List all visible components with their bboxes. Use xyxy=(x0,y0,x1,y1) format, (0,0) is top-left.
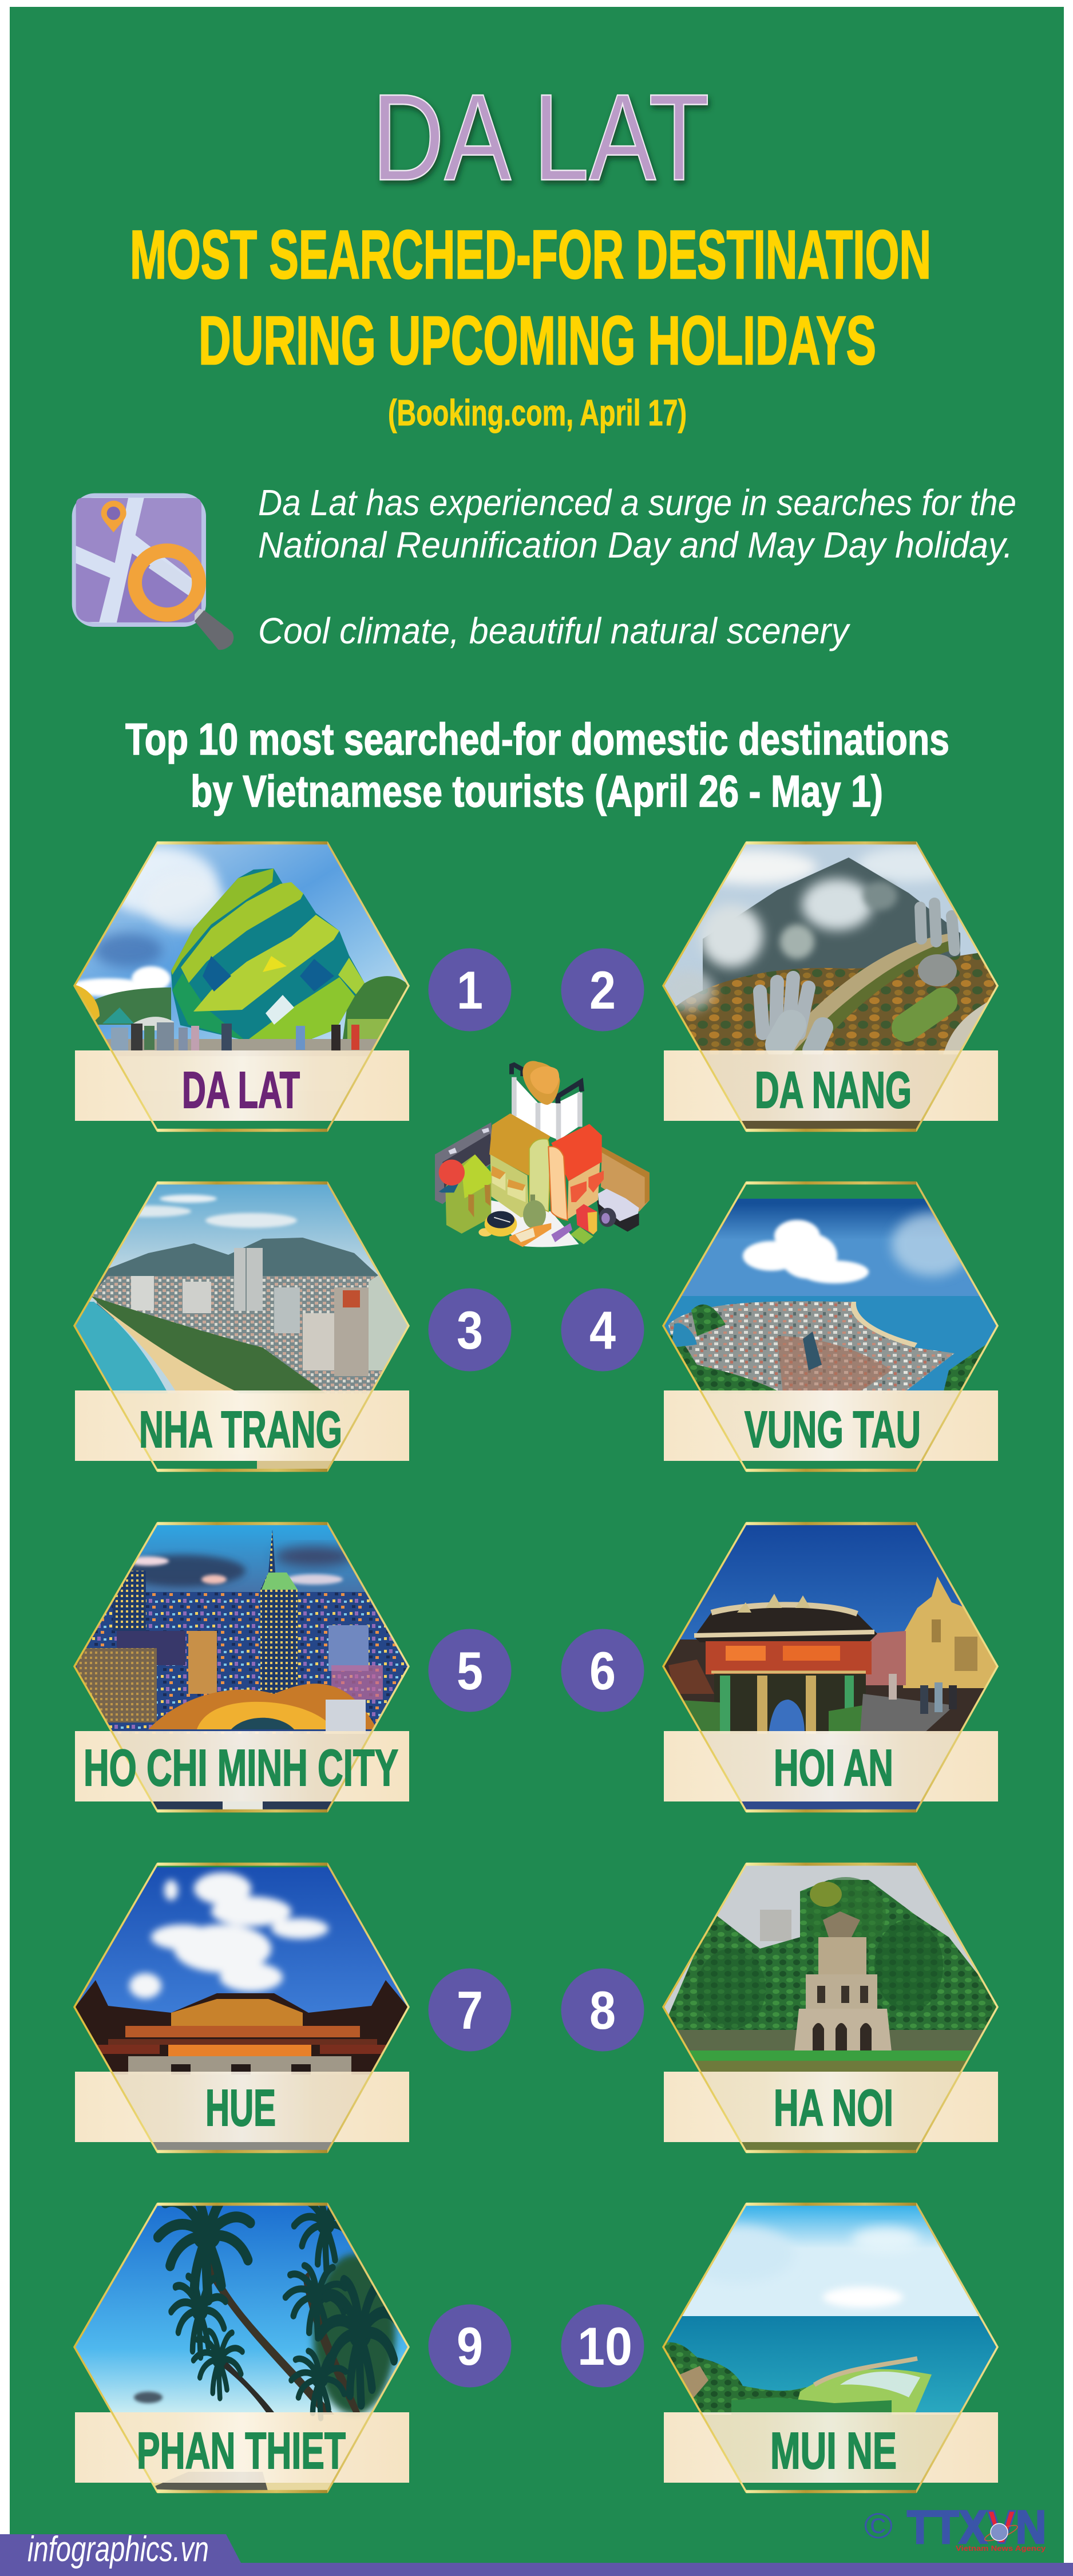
name: PHAN THIET xyxy=(137,2423,346,2480)
rank 7 xyxy=(428,1968,512,2052)
panel: 1 Da Lat xyxy=(68,843,409,1131)
rank 9 xyxy=(428,2305,512,2387)
hexagon frame xyxy=(663,2204,997,2492)
rank 8 xyxy=(561,1968,644,2052)
rank 5: 5 xyxy=(457,1641,483,1701)
name: DA NANG xyxy=(755,1062,912,1119)
label bar xyxy=(664,1731,998,1801)
hexagon frame xyxy=(663,1523,997,1811)
hexagon frame xyxy=(663,1864,997,2152)
hexagon frame xyxy=(663,1183,997,1471)
footer bar xyxy=(0,2534,1073,2576)
photo: Hue imperial gate xyxy=(74,1863,409,2153)
label bar xyxy=(664,1050,998,1121)
label bar xyxy=(75,2412,409,2483)
photo: Hoi An Japanese bridge xyxy=(663,1524,1000,1812)
photo: Vung Tau aerial xyxy=(664,1199,996,1390)
hexagon frame xyxy=(663,843,997,1131)
logo: TTXVN Vietnam News Agency: Vietnam News Agency xyxy=(956,2545,1046,2553)
intro text line 2: National Reunification Day and May Day holiday. xyxy=(258,524,1013,566)
section heading line 2: by Vietnamese tourists (April 26 - May 1) xyxy=(191,766,883,816)
hexagon frame xyxy=(74,1523,409,1811)
hexagon frame xyxy=(74,1864,409,2152)
panel: 3 Nha Trang xyxy=(74,1183,409,1472)
logo: TTXVN Vietnam News Agency: © xyxy=(864,2506,893,2546)
panel: 10 Mui Ne xyxy=(663,2204,998,2493)
name: HO CHI MINH CITY xyxy=(84,1740,398,1797)
panel: 7 Hue xyxy=(74,1863,409,2153)
panel: 4 Vung Tau xyxy=(663,1182,998,1471)
rank 6: 6 xyxy=(589,1641,616,1701)
rank 1 xyxy=(428,948,512,1032)
hexagon frame xyxy=(74,2204,409,2492)
rank 8: 8 xyxy=(589,1980,616,2040)
rank 10: 10 xyxy=(577,2316,632,2376)
rank 9: 9 xyxy=(457,2316,483,2376)
label bar xyxy=(664,2412,998,2483)
label bar xyxy=(75,2072,409,2142)
title: DA LAT xyxy=(372,68,710,206)
photo: Phan Thiet palm trees xyxy=(74,2188,409,2493)
rank 10 xyxy=(561,2305,644,2387)
rank 3 xyxy=(428,1288,512,1372)
rank 3: 3 xyxy=(457,1300,483,1360)
panel: 9 Phan Thiet xyxy=(74,2188,409,2493)
intro text line 3: Cool climate, beautiful natural scenery xyxy=(258,610,851,651)
rank 2: 2 xyxy=(589,960,616,1020)
photo: Mui Ne coast xyxy=(663,2205,998,2493)
photo: Nha Trang beach xyxy=(74,1183,409,1472)
source: (Booking.com, April 17) xyxy=(388,392,687,433)
rank 1: 1 xyxy=(457,960,483,1020)
label bar xyxy=(664,2072,998,2142)
icon: map with magnifier xyxy=(72,493,233,650)
name: HUE xyxy=(205,2080,276,2137)
rank 6 xyxy=(561,1629,644,1712)
name: HOI AN xyxy=(774,1740,893,1797)
photo: Da Lat flower-shaped glass building xyxy=(76,844,407,1050)
photo: Turtle Tower, Hoan Kiem Lake xyxy=(663,1864,998,2153)
rank 5 xyxy=(428,1629,512,1712)
name: VUNG TAU xyxy=(745,1401,921,1459)
label bar xyxy=(664,1390,998,1461)
photo: Golden Bridge xyxy=(663,843,998,1132)
label bar xyxy=(75,1390,409,1461)
label bar xyxy=(75,1731,409,1801)
intro text line 1: Da Lat has experienced a surge in searches for the xyxy=(258,482,1016,523)
photo: Ho Chi Minh City night xyxy=(74,1524,409,1812)
illustration: luggage xyxy=(435,1061,650,1247)
rank 4: 4 xyxy=(589,1300,616,1360)
hexagon frame xyxy=(74,1183,409,1471)
panel: 6 Hoi An xyxy=(663,1523,1000,1812)
name: HA NOI xyxy=(774,2080,893,2137)
name: MUI NE xyxy=(770,2423,897,2480)
hexagon frame xyxy=(74,843,409,1131)
rank 4 xyxy=(561,1288,644,1372)
label bar xyxy=(75,1050,409,1121)
footer site name: infographics.vn xyxy=(27,2530,209,2569)
panel: 5 Ho Chi Minh City xyxy=(74,1523,409,1812)
rank 7: 7 xyxy=(457,1980,483,2040)
logo: TTXVN Vietnam News Agency: TTXVN xyxy=(907,2502,1046,2554)
rank 2 xyxy=(561,948,644,1032)
panel: 2 Da Nang xyxy=(663,843,998,1132)
panel: 8 Ha Noi xyxy=(663,1864,998,2153)
name: NHA TRANG xyxy=(139,1401,342,1459)
name: DA LAT xyxy=(182,1062,300,1119)
